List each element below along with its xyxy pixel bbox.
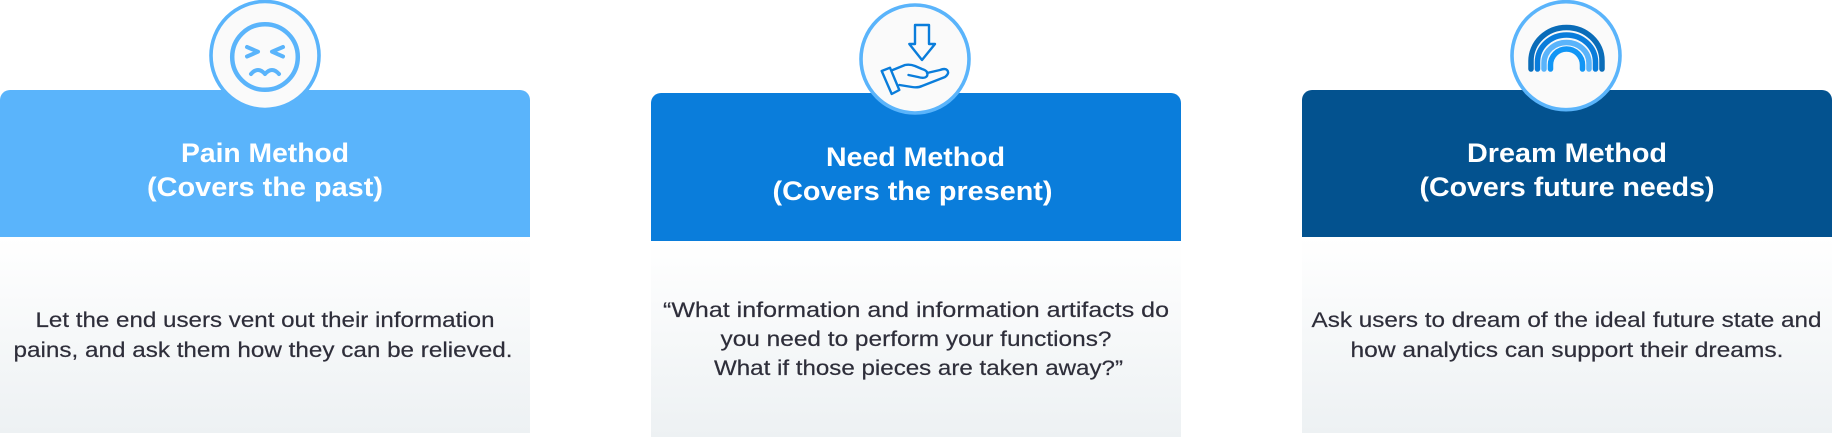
text: need description: “What information and information artifacts do <box>663 298 1169 322</box>
panel body: need <box>651 241 1181 437</box>
panel header: need <box>651 93 1181 241</box>
heading: dream method: (Covers future needs) <box>1420 172 1714 202</box>
panel header: pain <box>0 90 530 237</box>
text: need description: What if those pieces are taken away?” <box>714 356 1123 380</box>
text: need description: you need to perform your functions? <box>720 327 1112 351</box>
heading: pain method: Pain Method <box>181 138 349 168</box>
text: pain description <box>14 308 512 362</box>
heading: need method <box>772 142 1052 206</box>
heading: dream method <box>1420 138 1714 202</box>
text: pain description: pains, and ask them how they can be relieved. <box>14 338 512 362</box>
panel body: pain <box>0 237 530 433</box>
heading: need method: (Covers the present) <box>772 176 1052 206</box>
text: dream description: how analytics can support their dreams. <box>1350 338 1784 362</box>
panel header: dream <box>1302 90 1832 237</box>
text: need description <box>663 298 1169 380</box>
panel: dream method <box>1302 2 1832 433</box>
panel body: dream <box>1302 237 1832 433</box>
heading: pain method: (Covers the past) <box>147 172 383 202</box>
heading: need method: Need Method <box>826 142 1005 172</box>
panel: need method <box>651 5 1181 437</box>
panel: pain method <box>0 2 530 433</box>
icon: pained face <box>211 2 319 110</box>
icon: hand receiving arrow <box>861 5 969 113</box>
heading: pain method <box>147 138 383 202</box>
icon: rainbow <box>1512 2 1620 110</box>
text: dream description: Ask users to dream of the ideal future state and <box>1312 308 1822 332</box>
text: pain description: Let the end users vent out their information <box>36 308 494 332</box>
text: dream description <box>1312 308 1822 362</box>
heading: dream method: Dream Method <box>1467 138 1667 168</box>
